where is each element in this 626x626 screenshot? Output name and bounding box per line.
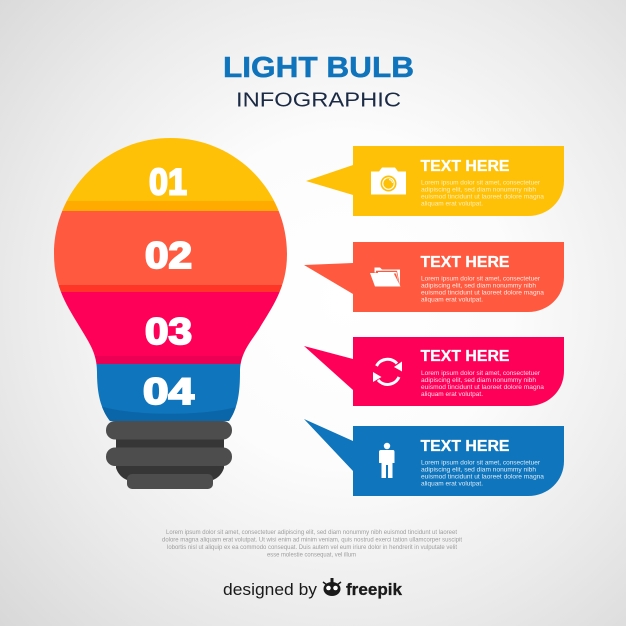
body text: euismod tincidunt ut laoreet dolore magna — [421, 194, 545, 200]
body text: aliquam erat volutpat. — [421, 298, 483, 304]
callout shape — [304, 242, 564, 312]
heading: light bulb: LIGHT BULB — [223, 52, 414, 84]
body text: adipiscing elit, sed diam nonummy nibh — [421, 284, 536, 290]
number 01: 01 — [149, 162, 187, 202]
footer text block: dolore magna aliquam erat volutpat. Ut wisi enim ad minim veniam, quis nostrud exerci tation ullamcorper suscipit — [162, 538, 462, 544]
number 04: 04 — [143, 371, 195, 412]
callout 2: coral — [304, 242, 564, 312]
body text: adipiscing elit, sed diam nonummy nibh — [421, 378, 536, 384]
body text: Lorem ipsum dolor sit amet, consectetuer — [421, 371, 540, 377]
heading: TEXT HERE — [420, 348, 510, 365]
heading: TEXT HERE — [420, 254, 510, 271]
credit: designed by freepik — [223, 578, 403, 599]
body text — [421, 276, 545, 304]
icon: freepik logo — [323, 578, 341, 596]
bulb glass bands — [54, 138, 287, 421]
callout shape — [304, 419, 564, 496]
number 02: 02 — [145, 235, 192, 276]
icon: person — [379, 443, 394, 478]
callout shape — [306, 146, 564, 216]
body text: euismod tincidunt ut laoreet dolore magna — [421, 474, 545, 480]
bulb screw base — [106, 421, 232, 489]
heading: TEXT HERE — [420, 158, 510, 175]
body text: adipiscing elit, sed diam nonummy nibh — [421, 188, 536, 194]
footer text block: esse molestie consequat, vel illum — [267, 552, 356, 558]
icon: folder — [370, 268, 400, 286]
body text — [421, 371, 545, 398]
footer text block — [162, 530, 462, 558]
body text: adipiscing elit, sed diam nonummy nibh — [421, 468, 536, 474]
body text: Lorem ipsum dolor sit amet, consectetuer — [421, 180, 540, 186]
body text: aliquam erat volutpat. — [421, 482, 483, 488]
credit: designed by freepik: freepik — [346, 580, 403, 599]
body text: aliquam erat volutpat. — [421, 202, 483, 208]
body text — [421, 460, 545, 488]
body text — [421, 180, 545, 208]
heading: infographic: INFOGRAPHIC — [236, 88, 401, 112]
icon: camera — [371, 168, 406, 194]
body text: aliquam erat volutpat. — [421, 392, 483, 398]
light bulb chart — [54, 138, 287, 489]
title — [223, 52, 414, 112]
body text: Lorem ipsum dolor sit amet, consectetuer — [421, 276, 540, 282]
heading: TEXT HERE — [420, 438, 510, 455]
callout 4: blue — [304, 419, 564, 496]
body text: Lorem ipsum dolor sit amet, consectetuer — [421, 460, 540, 466]
body text: euismod tincidunt ut laoreet dolore magna — [421, 385, 545, 391]
body text: euismod tincidunt ut laoreet dolore magna — [421, 290, 545, 296]
callout shape — [304, 337, 564, 406]
footer text block: Lorem ipsum dolor sit amet, consectetuer adipiscing elit, sed diam nonummy nibh euismod tincidunt ut laoreet — [166, 530, 457, 536]
callout 1: yellow — [306, 146, 564, 216]
footer text block: lobortis nisl ut aliquip ex ea commodo consequat. Duis autem vel eum iriure dolor in hendrerit in vulputate velit — [167, 545, 457, 551]
icon: refresh arrows — [373, 359, 402, 384]
credit: designed by freepik: designed by — [223, 580, 318, 599]
callout 3: pink — [304, 337, 564, 406]
number 03: 03 — [145, 311, 192, 352]
